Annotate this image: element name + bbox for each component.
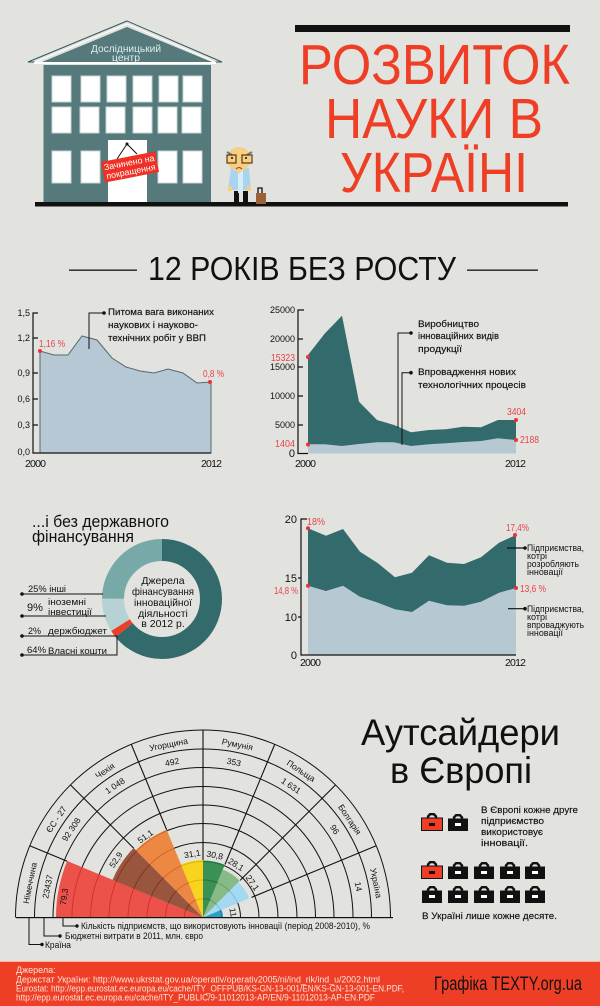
polar chart: European countries: 1 048: [103, 775, 127, 796]
donut legend: Власні кошти: [48, 646, 107, 656]
chart: enterprises developing and implementing innovation: котрі: [527, 612, 547, 622]
text: Ukraine: В Україні лише кожне десяте.: [422, 911, 557, 922]
chart: R&D share of GDP: 1,16 %: [39, 339, 65, 350]
donut chart: innovation funding sources: діяльності: [138, 608, 188, 620]
icons: one of ten enterprises in Ukraine: [422, 862, 545, 903]
chart: R&D share of GDP: 1,2: [17, 333, 30, 343]
donut legend: 9%: [27, 602, 43, 614]
polar chart: European countries: Болгарія: [336, 802, 364, 837]
chart: innovative production and technology processes: 10000: [270, 391, 295, 401]
donut chart: innovation funding sources: фінансування: [132, 586, 194, 598]
chart: enterprises developing and implementing innovation: 18%: [307, 517, 325, 528]
footer band: Держстат України: http://www.ukrstat.gov.ua/operativ/operativ2005/ni/ind_rik/ind_u/2002.html: [16, 974, 380, 984]
heading: and without state funding: ...і без державного: [32, 512, 169, 531]
chart: R&D share of GDP: 1,5: [17, 308, 30, 318]
polar chart: European countries: Польща: [285, 758, 317, 784]
title: РОЗВИТОК: [299, 33, 570, 97]
chart: enterprises developing and implementing innovation: Підприємства,: [527, 604, 584, 614]
chart: R&D share of GDP: наукових і науково-: [108, 320, 198, 331]
heading: outsiders in Europe: в Європі: [390, 750, 532, 791]
polar chart: European countries: 27,1: [244, 873, 262, 893]
chart: innovative production and technology processes: 2012: [505, 458, 526, 470]
polar chart: European countries: 28,1: [226, 856, 246, 873]
illustration: closed research centre building: Зачинено на: [103, 153, 155, 172]
polar chart: European countries: Німеччина: [21, 861, 39, 905]
polar chart: European countries: 1 631: [279, 776, 303, 796]
chart: enterprises developing and implementing innovation: котрі: [527, 551, 547, 561]
chart: R&D share of GDP: [17, 307, 224, 470]
polar chart: European countries: Угорщина: [148, 736, 189, 753]
polar chart legend: Країна: [45, 940, 71, 950]
chart: enterprises developing and implementing innovation: 0: [291, 650, 297, 662]
polar chart: European countries: 11: [227, 907, 239, 918]
polar chart: European countries: 92 308: [60, 816, 83, 843]
chart: innovative production and technology processes: Впровадження нових: [418, 367, 516, 378]
chart: innovative production and technology processes: 0: [289, 448, 295, 460]
chart: R&D share of GDP: 0,0: [17, 447, 30, 457]
heading: and without state funding: [32, 512, 169, 546]
text: Europe: використовує: [481, 827, 543, 838]
chart: enterprises developing and implementing innovation: 2000: [300, 657, 321, 669]
polar chart legend: Кількість підприємств, що використовують інновації (період 2008-2010), %: [81, 921, 370, 931]
heading: 12 years without growth: 12 РОКІВ БЕЗ РОСТУ: [148, 251, 457, 288]
polar chart: European countries: 23437: [40, 874, 55, 899]
illustration: closed research centre building: Дослідницький: [91, 43, 161, 55]
chart: innovative production and technology processes: 15000: [270, 362, 295, 372]
heading: outsiders in Europe: Аутсайдери: [361, 712, 560, 753]
footer band: Джерела:: [16, 965, 56, 975]
icons: one of two enterprises in Europe: [422, 814, 468, 831]
chart: R&D share of GDP: технічних робіт у ВВП: [108, 333, 206, 344]
chart: innovative production and technology processes: 20000: [270, 334, 295, 344]
polar chart: European countries: ЄС - 27: [44, 804, 69, 835]
chart: enterprises developing and implementing innovation: інновації: [527, 567, 563, 577]
heading: outsiders in Europe: [361, 712, 560, 791]
text: Europe: підприємство: [481, 816, 544, 827]
donut legend: 64%: [27, 645, 47, 656]
illustration: closed research centre building: покращення: [105, 162, 156, 181]
donut chart: innovation funding sources: Джерела: [141, 575, 185, 587]
illustration: closed research centre building: центр: [112, 52, 140, 64]
footer band: [0, 961, 600, 1006]
polar chart: European countries: 14: [353, 881, 364, 892]
chart: enterprises developing and implementing innovation: розробляють: [527, 559, 579, 569]
polar chart: European countries: 96: [328, 823, 342, 836]
polar chart: European countries: [16, 730, 393, 918]
chart: enterprises developing and implementing innovation: 2012: [505, 657, 526, 669]
donut chart: innovation funding sources: в 2012 р.: [141, 618, 185, 630]
chart: enterprises developing and implementing innovation: інновації: [527, 628, 563, 638]
chart: innovative production and technology processes: 3404: [507, 407, 526, 418]
chart: R&D share of GDP: 0,3: [17, 420, 30, 430]
chart: innovative production and technology processes: [270, 305, 539, 470]
chart: enterprises developing and implementing innovation: 10: [285, 612, 297, 624]
polar chart: European countries: 353: [226, 756, 242, 768]
chart: innovative production and technology processes: 1404: [275, 439, 295, 450]
chart: enterprises developing and implementing innovation: 20: [285, 514, 297, 526]
chart: innovative production and technology processes: 25000: [270, 305, 295, 315]
polar chart: European countries: Румунія: [221, 736, 254, 752]
polar chart: European countries: 52,9: [107, 850, 125, 870]
heading: and without state funding: фінансування: [32, 527, 134, 546]
chart: R&D share of GDP: 2012: [201, 458, 222, 470]
footer band: Eurostat: http://epp.eurostat.ec.europa.eu/cache/ITY_OFFPUB/KS-GN-13-001/EN/KS-GN-13-001-EN.PDF,: [16, 984, 404, 994]
chart: innovative production and technology processes: 15323: [271, 353, 295, 364]
donut legend: [20, 584, 117, 657]
title: [295, 25, 570, 205]
chart: enterprises developing and implementing innovation: 13,6 %: [520, 584, 546, 595]
chart: R&D share of GDP: 0,9: [17, 368, 30, 378]
donut legend: держбюджет: [48, 626, 107, 636]
chart: R&D share of GDP: 0,8 %: [203, 369, 224, 380]
polar chart: European countries: 30,8: [206, 849, 224, 862]
donut legend: 25% інші: [28, 584, 66, 595]
chart: enterprises developing and implementing innovation: 15: [285, 573, 297, 585]
icon: scientist with suitcase: [227, 147, 266, 204]
ground line: [35, 202, 568, 206]
polar chart: European countries: Україна: [368, 867, 384, 899]
chart: R&D share of GDP: Питома вага виконаних: [108, 307, 214, 318]
text: Europe: інновації.: [481, 838, 528, 849]
chart: innovative production and technology processes: Виробництво: [418, 319, 479, 330]
chart: R&D share of GDP: 0,6: [17, 394, 30, 404]
donut legend: іноземні: [48, 597, 86, 607]
text: Europe: [481, 805, 578, 849]
chart: enterprises developing and implementing innovation: 14,8 %: [274, 586, 298, 597]
chart: innovative production and technology processes: 2000: [295, 458, 316, 470]
polar chart: European countries: Чехія: [93, 761, 117, 781]
chart: R&D share of GDP: 2000: [25, 458, 46, 470]
footer band: http://epp.eurostat.ec.europa.eu/cache/ITY_PUBLIC/9-11012013-AP/EN/9-11012013-AP-EN.PDF: [16, 992, 375, 1002]
chart: innovative production and technology processes: 5000: [275, 420, 295, 430]
text: Europe: В Європі кожне друге: [481, 805, 578, 816]
chart: enterprises developing and implementing innovation: [274, 514, 584, 669]
donut legend: інвестиції: [48, 607, 93, 617]
polar chart: European countries: 79,3: [58, 888, 70, 906]
chart: enterprises developing and implementing innovation: 17,4%: [506, 523, 529, 534]
polar chart: European countries: 492: [164, 756, 180, 768]
donut chart: innovation funding sources: інноваційної: [134, 597, 192, 609]
title: УКРАЇНІ: [340, 141, 528, 205]
chart: enterprises developing and implementing innovation: Підприємства,: [527, 543, 584, 553]
chart: innovative production and technology processes: 2188: [520, 435, 539, 446]
polar chart: European countries: 31,1: [183, 848, 202, 860]
polar chart: European countries: 51,1: [136, 827, 155, 845]
chart: innovative production and technology processes: продукції: [418, 344, 462, 355]
title: НАУКИ В: [325, 87, 543, 151]
donut chart: innovation funding sources: [113, 550, 211, 648]
polar chart legend: Бюджетні витрати в 2011, млн. євро: [65, 931, 203, 941]
illustration: closed research centre building: [28, 21, 222, 202]
chart: innovative production and technology processes: технологічних процесів: [418, 380, 526, 391]
polar chart legend: [29, 918, 370, 950]
donut legend: 2%: [28, 626, 41, 636]
chart: innovative production and technology processes: інноваційних видів: [418, 331, 499, 342]
chart: enterprises developing and implementing innovation: впроваджують: [527, 620, 584, 630]
